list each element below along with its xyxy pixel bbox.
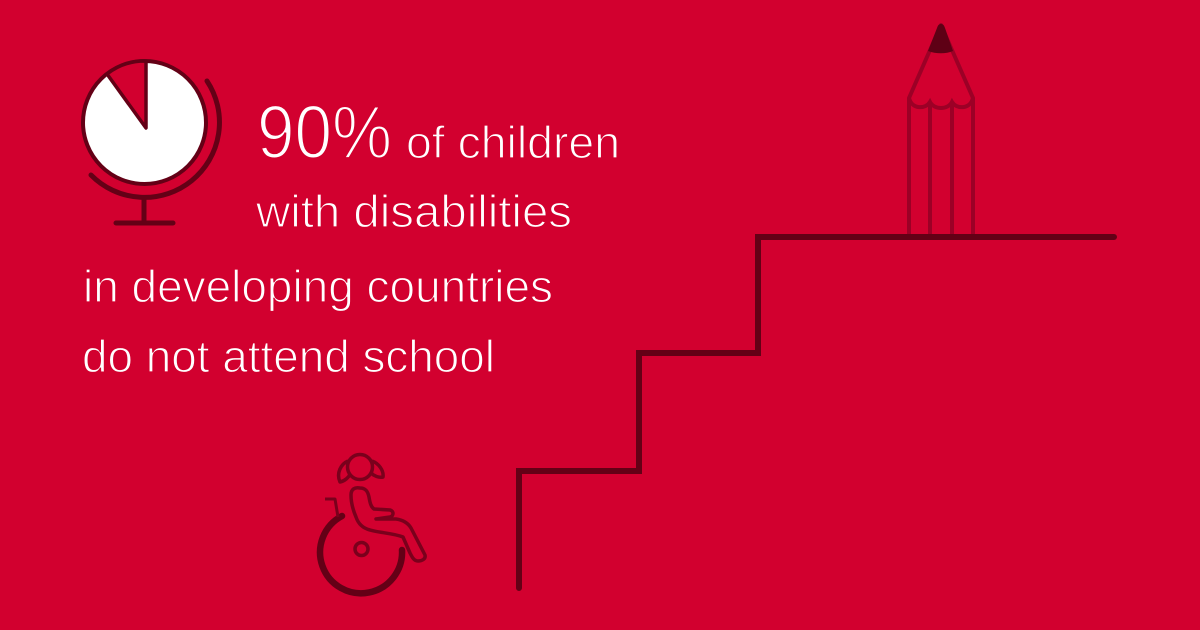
icon: pencil bbox=[909, 24, 973, 234]
text line: of children: of children bbox=[406, 117, 620, 168]
text line: do not attend school: do not attend school bbox=[82, 331, 495, 382]
big statistic: 90%: 90% bbox=[257, 90, 392, 174]
icon: child in wheelchair bbox=[320, 454, 425, 593]
text line: with disabilities: with disabilities bbox=[255, 186, 572, 237]
icon: globe pie chart showing 90% bbox=[83, 61, 219, 223]
wheel bbox=[320, 516, 402, 593]
headline text bbox=[82, 90, 620, 382]
text line: in developing countries: in developing countries bbox=[83, 261, 553, 312]
pencil tip bbox=[928, 24, 953, 53]
stairs bbox=[519, 237, 1114, 588]
wheel hub bbox=[355, 542, 368, 556]
head and pigtails bbox=[339, 454, 383, 482]
chair handle bbox=[325, 499, 338, 517]
body and legs bbox=[351, 488, 425, 561]
